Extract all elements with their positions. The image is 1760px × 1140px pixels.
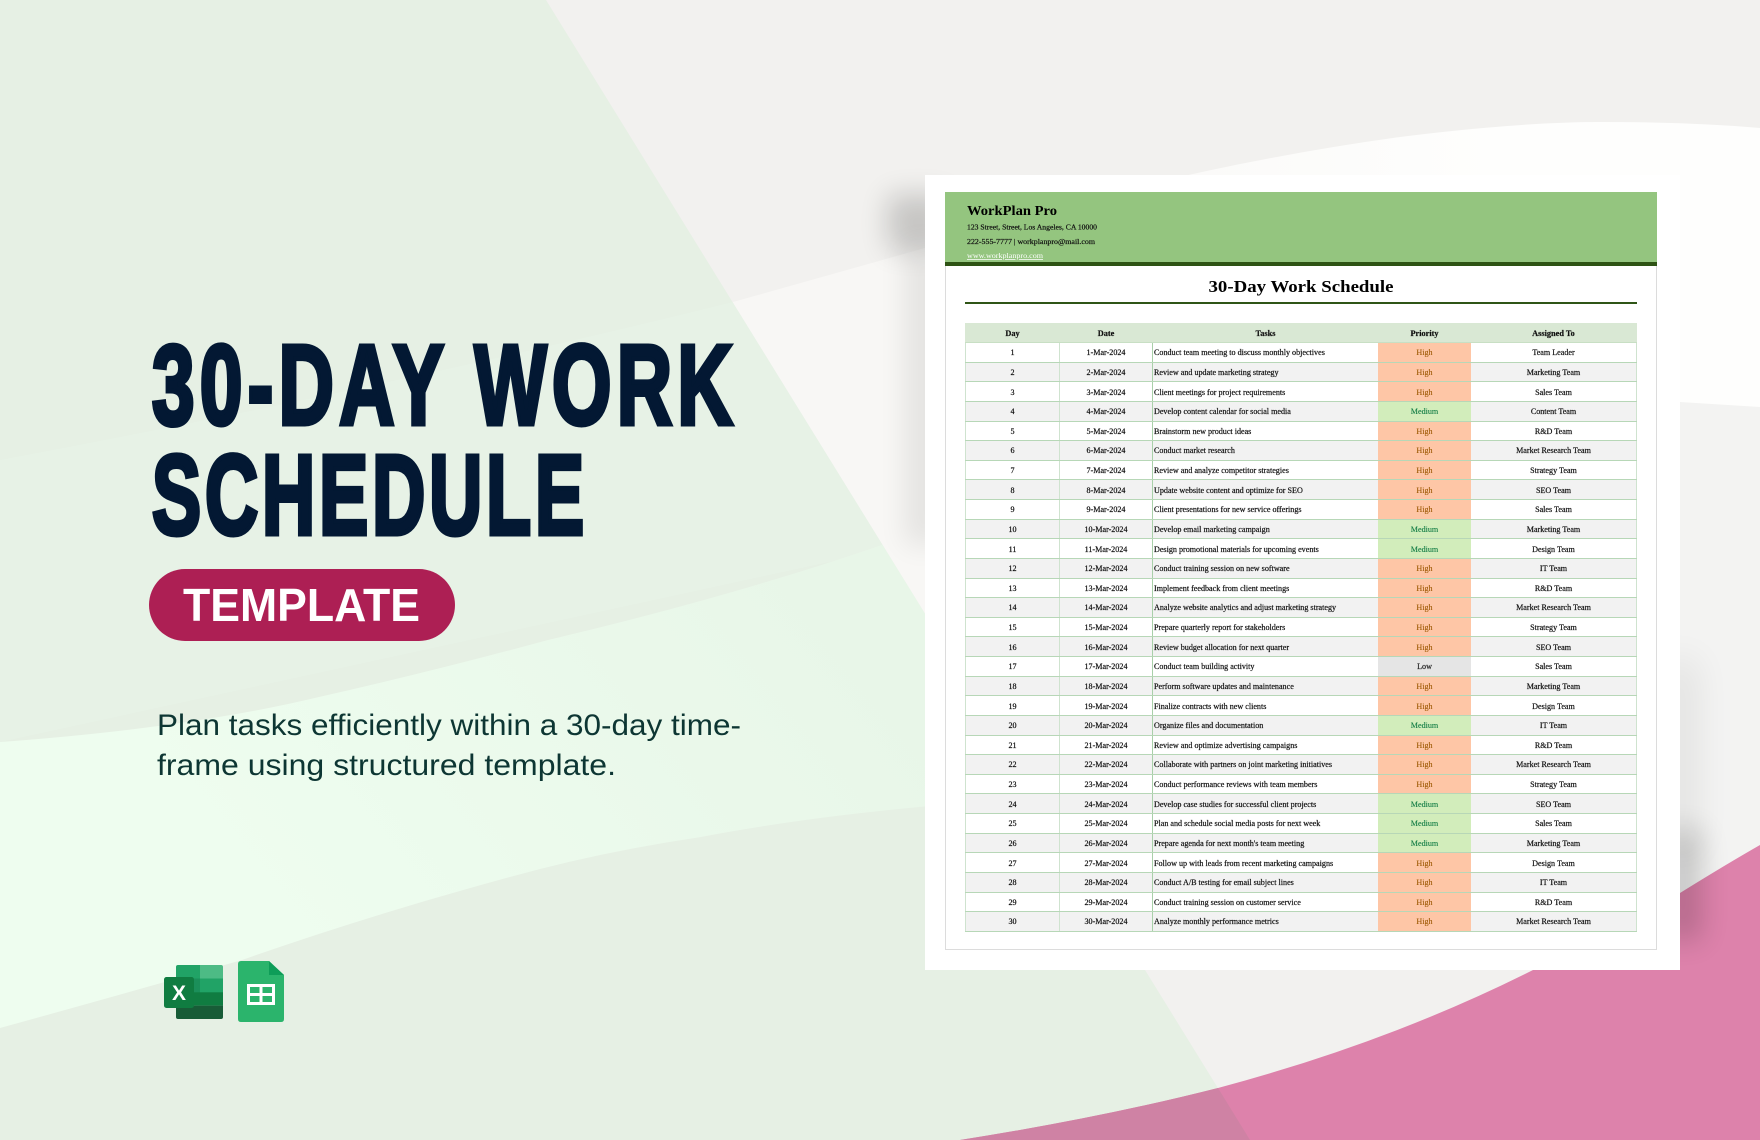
schedule table: 2 bbox=[1010, 368, 1015, 377]
schedule table: 2-Mar-2024 bbox=[1087, 368, 1125, 377]
schedule table: Plan and schedule social media posts for next week bbox=[1154, 819, 1320, 828]
schedule table: Develop case studies for successful client projects bbox=[1154, 800, 1316, 809]
schedule table: Marketing Team bbox=[1527, 839, 1580, 848]
schedule table: 22-Mar-2024 bbox=[1084, 760, 1128, 769]
schedule table: 19-Mar-2024 bbox=[1084, 702, 1128, 711]
schedule table: Client presentations for new service offerings bbox=[1154, 505, 1302, 514]
schedule table: 10-Mar-2024 bbox=[1084, 525, 1128, 534]
panel: company header band: www.workplanpro.com bbox=[967, 251, 1043, 260]
schedule table: Content Team bbox=[1531, 407, 1576, 416]
schedule table: 7 bbox=[1010, 466, 1015, 475]
schedule table: 17 bbox=[1008, 662, 1017, 671]
schedule table: Update website content and optimize for SEO bbox=[1154, 486, 1303, 495]
schedule table: High bbox=[1416, 368, 1433, 377]
schedule table: 13 bbox=[1008, 584, 1017, 593]
panel: company header band: WorkPlan Pro bbox=[967, 203, 1057, 218]
schedule table: Organize files and documentation bbox=[1154, 721, 1263, 730]
schedule table: Analyze website analytics and adjust marketing strategy bbox=[1154, 603, 1336, 612]
schedule table: High bbox=[1416, 505, 1433, 514]
schedule table: 5 bbox=[1010, 427, 1015, 436]
schedule table: 26-Mar-2024 bbox=[1084, 839, 1128, 848]
schedule heading: 30-Day Work Schedule bbox=[1208, 277, 1394, 296]
schedule table: 28-Mar-2024 bbox=[1084, 878, 1128, 887]
schedule table: 29-Mar-2024 bbox=[1084, 898, 1128, 907]
schedule table: Strategy Team bbox=[1530, 780, 1577, 789]
panel: document card bbox=[925, 175, 1680, 970]
schedule table: High bbox=[1416, 446, 1433, 455]
schedule table: Brainstorm new product ideas bbox=[1154, 427, 1251, 436]
badge: template: TEMPLATE bbox=[183, 579, 420, 631]
schedule table: High bbox=[1416, 486, 1433, 495]
schedule table: Conduct team meeting to discuss monthly objectives bbox=[1154, 348, 1325, 357]
schedule table: Strategy Team bbox=[1530, 623, 1577, 632]
schedule table: Prepare agenda for next month's team meeting bbox=[1154, 839, 1304, 848]
schedule table: 17-Mar-2024 bbox=[1084, 662, 1128, 671]
schedule table: 27 bbox=[1008, 859, 1017, 868]
schedule table: High bbox=[1416, 603, 1433, 612]
schedule table: 3 bbox=[1010, 388, 1015, 397]
icon: excel bbox=[164, 965, 223, 1019]
schedule table: 8-Mar-2024 bbox=[1087, 486, 1125, 495]
schedule table: IT Team bbox=[1540, 721, 1567, 730]
schedule table: 15-Mar-2024 bbox=[1084, 623, 1128, 632]
schedule table: High bbox=[1416, 917, 1433, 926]
schedule table: Review and analyze competitor strategies bbox=[1154, 466, 1289, 475]
schedule table: Sales Team bbox=[1535, 662, 1572, 671]
schedule table: Market Research Team bbox=[1516, 760, 1591, 769]
schedule table: Develop email marketing campaign bbox=[1154, 525, 1270, 534]
subtitle: Plan tasks efficiently within a 30-day time- bbox=[157, 709, 741, 742]
schedule table: 20-Mar-2024 bbox=[1084, 721, 1128, 730]
schedule table: Medium bbox=[1411, 800, 1438, 809]
schedule table: R&D Team bbox=[1535, 741, 1572, 750]
schedule table: 14-Mar-2024 bbox=[1084, 603, 1128, 612]
schedule table: 9-Mar-2024 bbox=[1087, 505, 1125, 514]
schedule table: 1 bbox=[1010, 348, 1015, 357]
schedule table: Strategy Team bbox=[1530, 466, 1577, 475]
panel: spreadsheet sheet bbox=[945, 192, 1657, 950]
subtitle: frame using structured template. bbox=[157, 749, 616, 782]
schedule table: Medium bbox=[1411, 839, 1438, 848]
schedule table: Conduct A/B testing for email subject lines bbox=[1154, 878, 1294, 887]
badge: template bbox=[149, 569, 455, 641]
schedule table: 9 bbox=[1010, 505, 1015, 514]
schedule table: Marketing Team bbox=[1527, 682, 1580, 691]
schedule table: 19 bbox=[1008, 702, 1017, 711]
schedule table: 23-Mar-2024 bbox=[1084, 780, 1128, 789]
schedule table: Team Leader bbox=[1532, 348, 1575, 357]
schedule table: IT Team bbox=[1540, 564, 1567, 573]
schedule table: SEO Team bbox=[1536, 486, 1571, 495]
table header row: Day bbox=[1005, 328, 1020, 338]
schedule table: 24-Mar-2024 bbox=[1084, 800, 1128, 809]
schedule table: 16-Mar-2024 bbox=[1084, 643, 1128, 652]
schedule table: Conduct team building activity bbox=[1154, 662, 1254, 671]
card shadows bbox=[888, 195, 1701, 940]
schedule table: 5-Mar-2024 bbox=[1087, 427, 1125, 436]
schedule table: Follow up with leads from recent marketing campaigns bbox=[1154, 859, 1333, 868]
schedule table: High bbox=[1416, 780, 1433, 789]
schedule table: Sales Team bbox=[1535, 819, 1572, 828]
schedule table: 18 bbox=[1008, 682, 1017, 691]
schedule table: High bbox=[1416, 584, 1433, 593]
schedule table: 21-Mar-2024 bbox=[1084, 741, 1128, 750]
schedule table: Review and optimize advertising campaigns bbox=[1154, 741, 1297, 750]
schedule table: Collaborate with partners on joint marketing initiatives bbox=[1154, 760, 1332, 769]
schedule table: 27-Mar-2024 bbox=[1084, 859, 1128, 868]
schedule table: 23 bbox=[1008, 780, 1017, 789]
schedule table: Client meetings for project requirements bbox=[1154, 388, 1285, 397]
schedule table: Review budget allocation for next quarter bbox=[1154, 643, 1289, 652]
schedule table: High bbox=[1416, 623, 1433, 632]
schedule table: Medium bbox=[1411, 525, 1438, 534]
schedule table: 20 bbox=[1008, 721, 1017, 730]
schedule table: 25-Mar-2024 bbox=[1084, 819, 1128, 828]
schedule table: Conduct training session on customer service bbox=[1154, 898, 1301, 907]
schedule table: 11 bbox=[1009, 545, 1016, 554]
schedule table: High bbox=[1416, 859, 1433, 868]
panel: company header band bbox=[945, 192, 1657, 266]
schedule table: Perform software updates and maintenance bbox=[1154, 682, 1294, 691]
panel: company header band: 222-555-7777 | workplanpro@mail.com bbox=[967, 237, 1095, 246]
schedule table: 14 bbox=[1008, 603, 1017, 612]
table header row: Date bbox=[1098, 328, 1114, 338]
schedule table: Conduct performance reviews with team members bbox=[1154, 780, 1317, 789]
schedule table: 13-Mar-2024 bbox=[1084, 584, 1128, 593]
schedule table: Marketing Team bbox=[1527, 525, 1580, 534]
icon: google sheets bbox=[238, 961, 284, 1022]
schedule table: Prepare quarterly report for stakeholders bbox=[1154, 623, 1285, 632]
schedule table: Medium bbox=[1411, 407, 1438, 416]
schedule table: Medium bbox=[1411, 819, 1438, 828]
schedule table: High bbox=[1416, 564, 1433, 573]
schedule table: SEO Team bbox=[1536, 800, 1571, 809]
schedule table: Design promotional materials for upcoming events bbox=[1154, 545, 1319, 554]
schedule table: IT Team bbox=[1540, 878, 1567, 887]
schedule table: 24 bbox=[1008, 800, 1017, 809]
schedule table: 16 bbox=[1008, 643, 1017, 652]
schedule table: 1-Mar-2024 bbox=[1087, 348, 1125, 357]
schedule table: 28 bbox=[1008, 878, 1017, 887]
schedule table: 15 bbox=[1008, 623, 1017, 632]
schedule table: 30-Mar-2024 bbox=[1084, 917, 1128, 926]
schedule table: 11-Mar-2024 bbox=[1085, 545, 1127, 554]
schedule table: 29 bbox=[1008, 898, 1017, 907]
schedule table: Implement feedback from client meetings bbox=[1154, 584, 1289, 593]
title bbox=[152, 322, 738, 558]
schedule table: 21 bbox=[1008, 741, 1017, 750]
table header row bbox=[965, 323, 1637, 343]
schedule table: 6 bbox=[1010, 446, 1015, 455]
schedule table: 3-Mar-2024 bbox=[1087, 388, 1125, 397]
panel: company header band: 123 Street, Street, Los Angeles, CA 10000 bbox=[967, 222, 1097, 232]
schedule table: Marketing Team bbox=[1527, 368, 1580, 377]
schedule table: Design Team bbox=[1532, 545, 1575, 554]
schedule table: High bbox=[1416, 741, 1433, 750]
schedule table: High bbox=[1416, 702, 1433, 711]
schedule table: 8 bbox=[1010, 486, 1015, 495]
subtitle bbox=[157, 709, 741, 782]
schedule table: 30 bbox=[1008, 917, 1017, 926]
schedule table: High bbox=[1416, 348, 1433, 357]
schedule table: 4 bbox=[1010, 407, 1015, 416]
schedule table: R&D Team bbox=[1535, 898, 1572, 907]
schedule table: Analyze monthly performance metrics bbox=[1154, 917, 1279, 926]
schedule table: Conduct training session on new software bbox=[1154, 564, 1290, 573]
schedule table: Finalize contracts with new clients bbox=[1154, 702, 1266, 711]
schedule table: 18-Mar-2024 bbox=[1084, 682, 1128, 691]
schedule table: 12 bbox=[1008, 564, 1017, 573]
schedule table: Market Research Team bbox=[1516, 446, 1591, 455]
schedule table: High bbox=[1416, 388, 1433, 397]
schedule table: SEO Team bbox=[1536, 643, 1571, 652]
schedule table: Low bbox=[1417, 662, 1432, 671]
icon: excel: X bbox=[172, 982, 186, 1005]
schedule table: High bbox=[1416, 898, 1433, 907]
schedule table bbox=[965, 323, 1637, 932]
schedule table: 25 bbox=[1008, 819, 1017, 828]
schedule table: High bbox=[1416, 878, 1433, 887]
schedule table: Medium bbox=[1411, 721, 1438, 730]
schedule table: Review and update marketing strategy bbox=[1154, 368, 1279, 377]
schedule table: Sales Team bbox=[1535, 388, 1572, 397]
schedule table: Develop content calendar for social media bbox=[1154, 407, 1291, 416]
schedule table: High bbox=[1416, 643, 1433, 652]
schedule table: 22 bbox=[1008, 760, 1017, 769]
schedule table: 10 bbox=[1008, 525, 1017, 534]
schedule table: Market Research Team bbox=[1516, 917, 1591, 926]
schedule table: R&D Team bbox=[1535, 427, 1572, 436]
schedule table: High bbox=[1416, 682, 1433, 691]
table header row: Priority bbox=[1410, 328, 1439, 338]
table header row: Tasks bbox=[1256, 328, 1276, 338]
schedule table: 12-Mar-2024 bbox=[1084, 564, 1128, 573]
table header row: Assigned To bbox=[1532, 328, 1575, 338]
schedule table: Design Team bbox=[1532, 702, 1575, 711]
schedule table: High bbox=[1416, 466, 1433, 475]
schedule table: R&D Team bbox=[1535, 584, 1572, 593]
schedule table: Design Team bbox=[1532, 859, 1575, 868]
schedule table: Medium bbox=[1411, 545, 1438, 554]
schedule table: 6-Mar-2024 bbox=[1087, 446, 1125, 455]
schedule table: Conduct market research bbox=[1154, 446, 1235, 455]
schedule table: 4-Mar-2024 bbox=[1087, 407, 1125, 416]
schedule table: High bbox=[1416, 427, 1433, 436]
schedule table: 7-Mar-2024 bbox=[1087, 466, 1125, 475]
schedule table: Market Research Team bbox=[1516, 603, 1591, 612]
schedule table: 26 bbox=[1008, 839, 1017, 848]
schedule table: High bbox=[1416, 760, 1433, 769]
schedule table: Sales Team bbox=[1535, 505, 1572, 514]
